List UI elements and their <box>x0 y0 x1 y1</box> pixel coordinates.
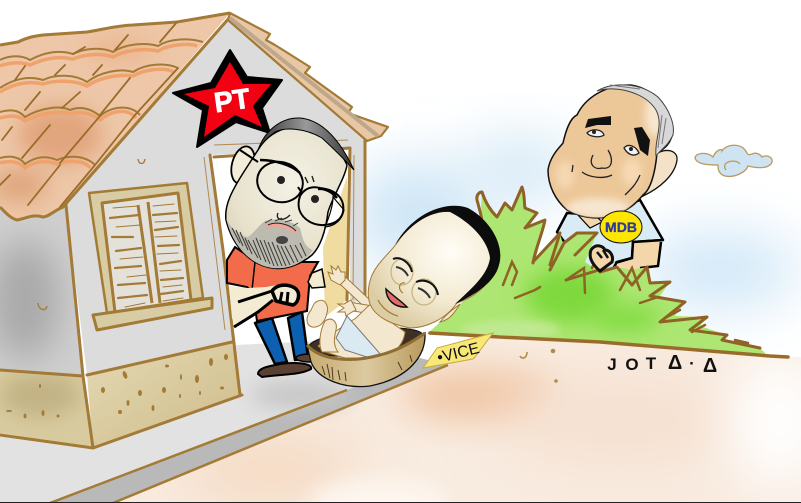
character: baby-like man in basin <box>307 206 500 358</box>
badge MDB <box>600 211 642 243</box>
ground <box>100 330 801 503</box>
shoes <box>296 354 324 362</box>
front wall <box>66 18 365 375</box>
basin back <box>307 323 425 361</box>
ear <box>440 304 460 322</box>
glasses <box>391 259 413 285</box>
signature: Δ <box>668 352 682 374</box>
far arm <box>308 269 325 288</box>
VICE tag <box>423 333 493 368</box>
side base <box>0 370 93 448</box>
nose <box>378 283 405 316</box>
beard <box>226 218 313 268</box>
head <box>548 85 673 218</box>
hair <box>597 85 673 156</box>
wall marks <box>38 159 145 310</box>
signature: J <box>607 355 617 374</box>
near arm <box>229 284 300 327</box>
badge MDB: MDB <box>605 219 637 235</box>
mouth <box>266 225 296 233</box>
raised arm <box>340 278 372 310</box>
glasses <box>240 150 344 227</box>
bottom border <box>0 502 801 503</box>
hair <box>258 118 354 170</box>
torso <box>318 303 405 358</box>
brows eyes <box>393 258 438 295</box>
signature: O <box>625 355 639 374</box>
neck <box>577 214 602 228</box>
doorway <box>210 148 350 345</box>
signature: · <box>689 354 695 373</box>
wall outlines <box>0 137 365 448</box>
shirt <box>557 200 663 290</box>
face shading <box>556 93 665 218</box>
nose <box>277 176 314 219</box>
slats <box>110 204 183 307</box>
eave right <box>228 13 388 141</box>
raised feet <box>307 300 328 327</box>
head <box>226 127 347 268</box>
fist <box>272 285 299 305</box>
character: man in doorway <box>226 118 354 377</box>
sill <box>93 298 212 330</box>
nose and mouth <box>572 150 640 195</box>
cloud <box>695 145 772 176</box>
side wall <box>0 205 83 376</box>
brows <box>260 160 337 198</box>
basin front <box>307 333 425 387</box>
diaper <box>336 316 382 358</box>
eyes <box>587 130 604 137</box>
grass mound <box>427 187 788 357</box>
roof <box>0 13 388 220</box>
signature: T <box>646 354 657 373</box>
ear <box>227 144 259 186</box>
shirt <box>227 247 318 321</box>
ground marks <box>520 350 557 382</box>
PT star logo: PT <box>212 83 252 118</box>
tile seams <box>0 22 178 207</box>
character: MDB man <box>548 85 677 290</box>
signature <box>607 352 717 377</box>
house <box>0 18 365 448</box>
front base <box>87 342 242 448</box>
ground line <box>430 333 788 357</box>
hair <box>395 206 500 304</box>
hands <box>328 266 345 285</box>
head <box>368 211 495 328</box>
window <box>89 183 212 330</box>
signature: Δ <box>703 355 717 377</box>
VICE tag: •VICE <box>435 340 481 367</box>
forearm <box>615 240 660 272</box>
mouth <box>386 289 407 307</box>
base speckles <box>6 354 228 418</box>
jeans <box>255 312 308 364</box>
sidewalk <box>0 330 448 503</box>
brows <box>585 116 611 128</box>
eyes <box>277 176 285 184</box>
PT star logo <box>173 50 282 147</box>
tile bands <box>0 39 203 168</box>
ear <box>643 150 677 196</box>
hand gripping bush <box>590 246 613 271</box>
